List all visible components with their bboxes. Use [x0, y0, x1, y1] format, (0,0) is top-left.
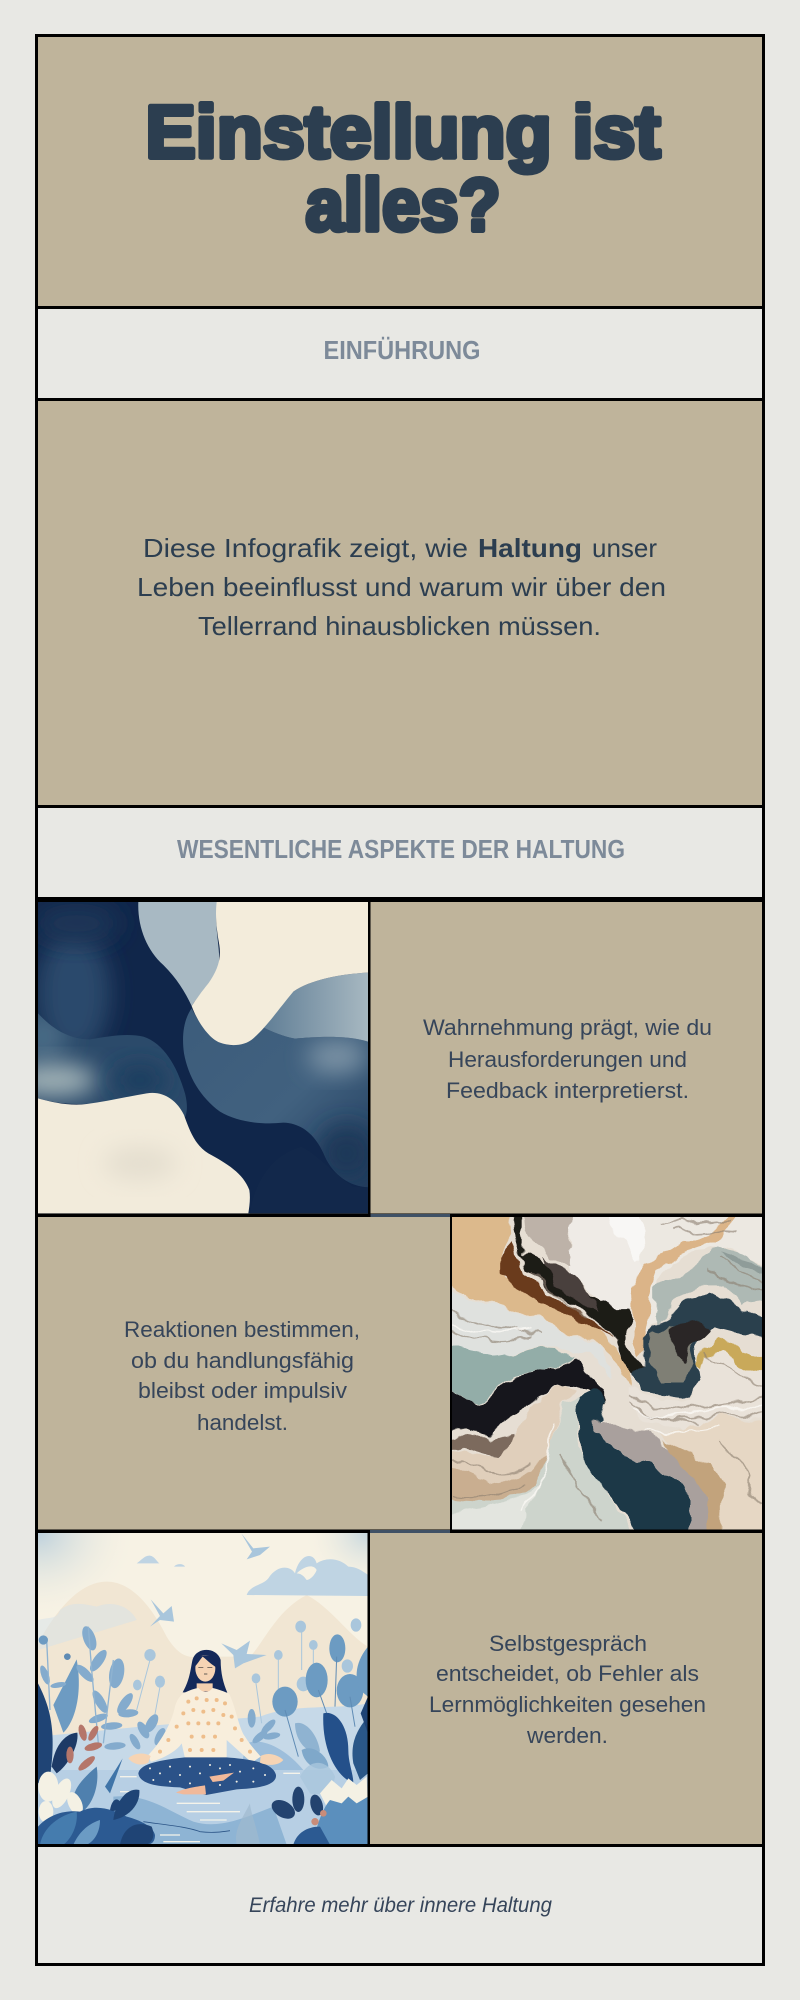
text: Wahrnehmung: Wahrnehmung prägt, wie du: [423, 1015, 712, 1040]
title: Einstellung ist: [146, 90, 660, 174]
intro text: [137, 533, 666, 641]
panel: introduction: [38, 401, 762, 805]
text: Selbstgespräch: entscheidet, ob Fehler als: [436, 1661, 699, 1686]
text: Selbstgespräch: Selbstgespräch: [489, 1631, 647, 1656]
panel: Wahrnehmung: [370, 902, 762, 1214]
text: Reaktionen: bleibst oder impulsiv: [138, 1378, 347, 1403]
text: Selbstgespräch: [429, 1631, 706, 1748]
text: Selbstgespräch: Lernmöglichkeiten gesehen: [429, 1692, 706, 1717]
heading: WESENTLICHE ASPEKTE DER HALTUNG: [177, 836, 625, 864]
image: meditating woman among plants: [38, 1533, 368, 1845]
panel: Selbstgespräch: [370, 1533, 762, 1844]
left plants: [38, 1624, 281, 1751]
heading: EINFÜHRUNG: [324, 336, 480, 365]
panel: call to action footer: [38, 1847, 762, 1963]
birds: [150, 1533, 270, 1668]
intro text: Diese Infografik zeigt, wie: [143, 533, 468, 563]
text: Wahrnehmung: Feedback interpretierst.: [446, 1078, 689, 1103]
right plants: [272, 1634, 368, 1717]
image: abstract blue waves: [10, 902, 377, 1213]
panel: heading Einführung: [38, 309, 762, 398]
text: Reaktionen: ob du handlungsfähig: [131, 1348, 354, 1373]
text: Reaktionen: [124, 1317, 360, 1435]
intro text: Tellerrand hinausblicken müssen.: [198, 611, 601, 641]
woman: [128, 1650, 283, 1795]
clouds: [137, 1556, 368, 1596]
band: centre wave: [180, 1007, 377, 1190]
text: Reaktionen: Reaktionen bestimmen,: [124, 1317, 360, 1342]
background stems and pale leaves: [133, 1618, 361, 1691]
panel: title: [38, 37, 762, 306]
panel: Reaktionen: [38, 1217, 450, 1530]
footer text: Erfahre mehr über innere Haltung: [249, 1894, 552, 1917]
image: marble swirl: [452, 1217, 762, 1530]
band: left wave: [38, 1014, 187, 1117]
panel: heading Wesentliche Aspekte: [38, 808, 762, 897]
intro text: Leben beeinflusst und warum wir über den: [137, 572, 666, 602]
title: [146, 90, 660, 246]
text: Wahrnehmung: Herausforderungen und: [448, 1047, 687, 1072]
intro text: unser: [592, 533, 657, 563]
intro text: Haltung: [478, 533, 582, 563]
title: alles?: [306, 164, 500, 246]
text: Reaktionen: handelst.: [197, 1410, 288, 1435]
text: Selbstgespräch: werden.: [526, 1723, 608, 1748]
text: Wahrnehmung: [423, 1015, 712, 1103]
